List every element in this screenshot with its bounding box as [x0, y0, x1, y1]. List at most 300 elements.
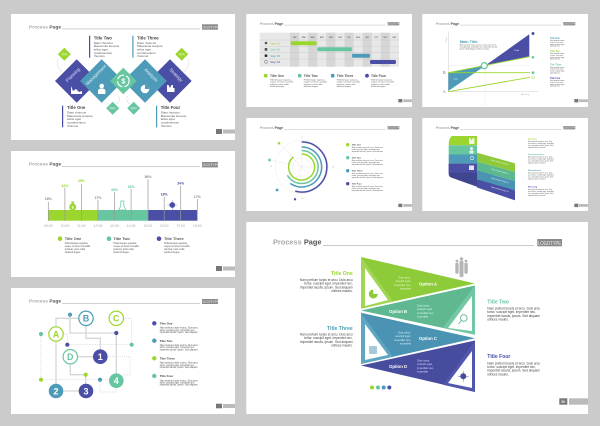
- front panel icons: [469, 138, 474, 170]
- text block: title two: imperdiet iaculis, ipsum. Sed aliquam: [487, 314, 540, 318]
- legend: title four: neque sit amet convallis: [371, 81, 395, 84]
- text block: title four: condimentum: [161, 120, 180, 124]
- text block: planning: aliquam ultrices mauris.: [528, 194, 546, 197]
- funnel: option C blue: imperdiet: [400, 342, 411, 346]
- legend: title one: Pellentesque egestas,: [270, 78, 292, 82]
- text block: recruitment: arcu tortor, suscipit eget, imperdiet: [528, 174, 554, 176]
- badge: green left: [58, 48, 71, 61]
- legend: title three: Title Three: [352, 170, 364, 172]
- text block: title four: tellus eget: [161, 117, 175, 121]
- node: 4: [109, 373, 124, 388]
- text block: title four: Nam pretium turpis et arcu. Duis arcu: [487, 361, 540, 365]
- text block: planning: nec, imperdiet iaculis, ipsum. Sed: [528, 192, 553, 195]
- text block: recruitment: Recruitment: [528, 169, 541, 172]
- text block: title four: [156, 105, 187, 128]
- text block: title three: Diam rhoncus: [137, 41, 157, 45]
- legend: title two: pulvinar, justo nulla: [304, 83, 323, 86]
- icon: database: [369, 346, 377, 354]
- text block: communication: Nam pretium turpis et arcu. Duis: [528, 156, 552, 158]
- heading: slide 8: LOGOTYPE: [538, 241, 561, 247]
- legend: title three: [157, 236, 190, 254]
- side note: title four: Title Four: [550, 77, 561, 80]
- funnel: option C blue: [361, 313, 475, 364]
- legend: title two: neque sit amet convallis: [113, 245, 140, 248]
- main title block: ipsum. Sed aliquam ultrices mauris.: [460, 48, 490, 50]
- panel: folded bands slide: [422, 118, 588, 211]
- text block: title one: Nam pretium turpis et arcu. Duis arcu: [300, 278, 353, 282]
- legend: title one: Title One: [270, 74, 284, 78]
- funnel: option C blue: Option C: [419, 336, 437, 341]
- badge: green left: 45%: [61, 52, 68, 56]
- radial scale labels: [270, 136, 334, 200]
- text block: title three: rhoncus: [137, 54, 148, 58]
- time axis labels: 11:00: [77, 224, 86, 228]
- legend: title three: [346, 169, 383, 179]
- legend: title three: pulvinar, justo nulla: [164, 248, 185, 251]
- text block: title two: [487, 300, 540, 322]
- text block: title three: imperdiet iaculis, ipsum. Sed aliquam: [300, 340, 353, 344]
- text block: title three: condimentum: [137, 51, 156, 55]
- text block: communication: [528, 153, 554, 164]
- text block: title one: [300, 271, 353, 293]
- text block: planning: [528, 187, 554, 197]
- text block: planning: Nam pretium turpis et arcu. Duis: [528, 188, 552, 191]
- legend: title four: [365, 74, 395, 88]
- timeline bar: [48, 210, 197, 221]
- text block: title two: Nam pretium turpis et arcu. Duis arcu: [487, 306, 540, 310]
- diamond: centre dollar: [110, 68, 137, 94]
- funnel: option A green: Duis tortor,: [398, 276, 411, 280]
- percentage labels: 45%: [78, 179, 86, 183]
- legend: title two: [152, 338, 198, 351]
- text block: title one: Title One: [67, 105, 86, 110]
- text block: title two: Title Two: [94, 35, 112, 40]
- legend: title two: Title Two: [160, 339, 173, 343]
- badge connector arcs: [57, 59, 189, 104]
- legend: title two: imperdiet iaculis, ipsum. Sed aliquam: [352, 163, 383, 166]
- heading: slide 2: [29, 162, 220, 168]
- panel: gantt slide: [246, 14, 412, 107]
- row labels: Step 03: [270, 54, 280, 58]
- page number: slide 8: 50: [561, 400, 565, 404]
- legend: title two: tortor, suscipit eget, imperdiet nec,: [352, 161, 381, 164]
- side note: title three: tortor, suscipit eget,: [550, 70, 565, 72]
- side note: title three: et arcu. Duis arcu: [550, 68, 563, 71]
- side note: title four: et arcu. Duis arcu: [550, 81, 563, 84]
- legend: title one: Title One: [352, 144, 362, 146]
- icon: pie chart: [369, 290, 378, 298]
- text block: title one: Maecenas tempus,: [67, 114, 93, 118]
- text block: title one: [62, 105, 93, 128]
- line end icons: [532, 32, 534, 79]
- panel: timeline slide: [11, 151, 235, 277]
- heading: slide 3: Process Page: [29, 298, 61, 304]
- legend: title four: imperdiet iaculis, ipsum. Sed aliquam: [160, 384, 198, 387]
- side note: title three: imperdiet nec.: [550, 71, 561, 74]
- legend: title three: tortor, suscipit eget, imperdiet nec,: [160, 364, 195, 367]
- wedge labels: [454, 49, 519, 80]
- text block: title four: tortor, suscipit eget, imperdiet nec,: [487, 365, 536, 369]
- funnel: option B teal: Option B: [389, 309, 407, 314]
- heading: slide 8: [273, 237, 562, 247]
- side note: title four: Nam pretium turpis: [550, 79, 564, 82]
- text block: title four: Title Four: [487, 354, 510, 360]
- legend: title four: tortor, suscipit eget, imperdiet nec,: [160, 382, 195, 384]
- legend: title four: Nam pretium turpis et arcu. Duis arcu: [160, 379, 198, 382]
- percentage labels: 30%: [111, 188, 119, 192]
- legend: title one: imperdiet iaculis, ipsum. Sed aliquam: [160, 331, 198, 334]
- heading: slide 4: LOGOTYPE: [387, 22, 400, 26]
- text block: title two: Diam rhoncus: [94, 41, 113, 45]
- legend: title two: [346, 156, 383, 166]
- legend: title three: imperdiet iaculis, ipsum. Sed aliquam: [352, 176, 383, 179]
- legend: title one: pulvinar, justo nulla: [270, 83, 289, 86]
- funnel: option A green: [361, 257, 475, 309]
- gantt chart: JUN: [338, 37, 342, 39]
- text block: communication: Communication: [528, 153, 545, 156]
- legend: title three: [331, 74, 361, 88]
- heading: slide 2: LOGOTYPE: [201, 163, 220, 167]
- legend: title one: tortor, suscipit eget, imperdiet nec,: [352, 148, 381, 151]
- timeline stems: [48, 179, 197, 221]
- panel: line chart slide: [422, 14, 588, 107]
- side note: title one: tortor, suscipit eget,: [550, 43, 565, 46]
- text block: title one: rhoncus: [67, 124, 78, 128]
- text block: title four: Diam rhoncus: [161, 110, 180, 114]
- time axis labels: 17:00: [176, 224, 185, 228]
- legend: title one: Title One: [160, 321, 173, 325]
- diamond: strategy: [148, 59, 192, 103]
- text block: planning: Planning: [528, 187, 538, 189]
- legend: title two: Title Two: [113, 236, 130, 241]
- legend: title two: eleifend augue: [113, 251, 130, 254]
- text block: title three: [132, 35, 163, 58]
- funnel: option D purple: [361, 340, 475, 392]
- diamond: analysis: Analysis: [143, 67, 159, 83]
- legend: title two: Pellentesque egestas,: [304, 78, 326, 82]
- funnel: option A green: imperdiet: [400, 287, 411, 291]
- legend: title one: eleifend augue: [65, 251, 81, 254]
- badge: teal right: 45%: [131, 106, 137, 110]
- main title block: [460, 39, 498, 50]
- side note: title one: et arcu. Duis arcu: [550, 41, 563, 44]
- row labels: Step 04: [270, 60, 280, 64]
- legend: title two: imperdiet iaculis, ipsum. Sed aliquam: [160, 348, 198, 351]
- legend: title three: imperdiet iaculis, ipsum. Sed aliquam: [160, 366, 198, 369]
- funnel: option D purple: suscipit eget,: [417, 362, 433, 366]
- main title block: suscipit eget, imperdiet nec, imperdiet iaculis,: [460, 46, 498, 48]
- side note: title four: imperdiet nec.: [550, 85, 561, 88]
- underside fold: [449, 164, 515, 200]
- text block: title one: imperdiet iaculis, ipsum. Sed aliquam: [300, 285, 353, 289]
- percentage labels: 16%: [45, 197, 53, 201]
- side note: title two: Nam pretium turpis: [550, 52, 564, 55]
- page number: slide 2: [216, 266, 235, 271]
- text block: title two: tortor, suscipit eget, imperdiet nec,: [487, 310, 536, 314]
- percentage labels: 18%: [161, 192, 169, 196]
- funnel: option D purple: imperdiet nec,: [417, 366, 434, 370]
- pagination dots: [370, 386, 391, 390]
- time axis labels: 09:00: [44, 224, 53, 228]
- text block: analysis: aliquam ultrices mauris.: [528, 146, 546, 149]
- panel: options slide (large): [246, 222, 588, 414]
- time axis labels: 16:00: [160, 224, 169, 228]
- node: A: [49, 327, 63, 341]
- node: D: [63, 350, 78, 364]
- legend: title one: [152, 321, 198, 334]
- time axis labels: 18:00: [193, 224, 202, 228]
- text block: title four: ultrices mauris.: [487, 372, 509, 376]
- side note: title two: et arcu. Duis arcu: [550, 54, 563, 57]
- legend: title one: eleifend augue: [270, 86, 285, 88]
- legend: title three: tortor, suscipit eget, imperdiet nec,: [352, 174, 381, 177]
- node: 2: [49, 384, 63, 398]
- node: A: A: [53, 329, 60, 339]
- text block: title four: [487, 354, 540, 376]
- text block: communication: aliquam ultrices mauris.: [528, 162, 546, 164]
- gantt chart: [260, 33, 399, 67]
- solid connector lines: [56, 315, 116, 391]
- slanted labels: [491, 159, 509, 193]
- heading: slide 3: LOGOTYPE: [201, 300, 220, 304]
- funnel: option A green: Option A: [419, 282, 437, 286]
- text block: title three: [300, 326, 353, 348]
- heading: slide 2: Process Page: [29, 162, 61, 168]
- gantt chart: MAR: [311, 36, 315, 39]
- badge: teal left: 45%: [110, 106, 116, 110]
- page number: slide 1: [216, 129, 235, 134]
- node: 3: 3: [83, 386, 89, 396]
- text block: analysis: arcu tortor, suscipit eget, imperdiet: [528, 142, 554, 145]
- legend: title three: neque sit amet convallis: [164, 245, 190, 248]
- page number: slide 4: [398, 99, 412, 102]
- legend: title two: eleifend augue: [304, 86, 319, 88]
- text block: title two: tellus eget: [94, 48, 108, 52]
- icon: light bulb: [458, 371, 469, 382]
- intersection ring: [481, 63, 487, 69]
- text block: recruitment: nec, imperdiet iaculis, ipsum. Sed: [528, 176, 553, 178]
- legend: title four: [346, 182, 383, 192]
- page number: slide 7: [574, 204, 588, 207]
- heading: slide 6: Process Page: [260, 126, 283, 130]
- area: blue wedge: [448, 66, 485, 91]
- legend: title three: neque sit amet convallis: [337, 81, 361, 84]
- radial scale labels: 75: [270, 166, 272, 168]
- legend: title two: neque sit amet convallis: [304, 81, 328, 84]
- time axis labels: 14:00: [127, 224, 136, 228]
- text block: title four: Title Four: [161, 105, 181, 110]
- heading: slide 4: Process Page: [260, 22, 283, 26]
- row icons: [264, 42, 268, 63]
- text block: title three: Maecenas tempus,: [137, 44, 163, 48]
- legend: title four: pulvinar, justo nulla: [371, 83, 390, 86]
- funnel: option D purple: imperdiet: [417, 370, 428, 374]
- legend: title four: Title Four: [371, 74, 387, 78]
- legend: title one: imperdiet iaculis, ipsum. Sed aliquam: [352, 150, 383, 153]
- funnel: option B teal: suscipit eget,: [417, 307, 433, 311]
- side note: title three: [550, 64, 565, 74]
- heading: slide 7: [436, 126, 576, 130]
- legend: title one: tortor, suscipit eget, imperdiet nec,: [160, 329, 195, 332]
- legend: title three: pulvinar, justo nulla: [337, 83, 356, 86]
- side note: title one: Nam pretium turpis: [550, 39, 564, 42]
- time axis labels: [44, 224, 202, 228]
- text block: recruitment: [528, 169, 554, 180]
- text block: planning: arcu tortor, suscipit eget, imperdiet: [528, 190, 554, 193]
- badge: teal right: [127, 102, 140, 115]
- legend: title two: Nam pretium turpis et arcu. Duis arcu: [352, 159, 383, 162]
- diamond: management: [80, 59, 123, 103]
- legend: title four: Nam pretium turpis et arcu. Duis arcu: [352, 185, 383, 188]
- percentage labels: 42%: [61, 184, 69, 188]
- heading: slide 8: Process Page: [273, 237, 322, 246]
- legend: title one: pulvinar, justo nulla: [65, 248, 86, 251]
- legend: title three: [152, 356, 198, 369]
- heading: slide 1: Process Page: [29, 24, 61, 30]
- text block: title two: rhoncus: [94, 54, 105, 58]
- badge: green right: 45%: [179, 52, 185, 56]
- radial scale labels: 25: [332, 166, 334, 168]
- funnel: option B teal: imperdiet: [417, 315, 428, 319]
- funnel: option D purple: Duis tortor,: [417, 358, 430, 362]
- node: 1: [93, 349, 108, 364]
- funnel: option C blue: Duis tortor,: [398, 330, 411, 334]
- funnel: option B teal: [361, 286, 475, 335]
- legend: title four: tortor, suscipit eget, imperdiet nec,: [352, 187, 381, 190]
- page number: slide 3: [216, 404, 235, 408]
- diamond: planning: [55, 59, 98, 103]
- percentage labels: 17%: [94, 196, 102, 200]
- diamond: strategy: Strategy: [168, 67, 184, 83]
- node: B: B: [83, 314, 90, 324]
- funnel: option B teal: imperdiet nec,: [417, 311, 434, 315]
- percentage labels: 36%: [144, 175, 152, 179]
- side note: title four: [550, 77, 565, 88]
- heading: slide 7: Process Page: [436, 126, 459, 130]
- node: 1: 1: [98, 352, 103, 362]
- text block: communication: arcu tortor, suscipit eget, imperdiet: [528, 158, 554, 160]
- axis titles: Marketing: [521, 93, 529, 96]
- text block: title four: Maecenas tempus,: [161, 114, 187, 118]
- gantt chart: MAY: [329, 36, 334, 39]
- legend: title one: Nam pretium turpis et arcu. Duis arcu: [160, 327, 198, 330]
- text block: title three: Title Three: [327, 326, 353, 332]
- slanted labels: Nam pretium turpis et: [491, 159, 509, 166]
- diamond: management: Management: [85, 63, 108, 86]
- icon: people: [455, 257, 468, 277]
- row labels: [270, 41, 280, 64]
- side note: title two: [550, 50, 565, 61]
- row labels: Step 01: [270, 41, 280, 45]
- radial scale labels: 0: [301, 136, 302, 138]
- heading: slide 5: LOGOTYPE: [563, 22, 576, 26]
- badge: green right: [175, 48, 188, 61]
- text block: title one: condimentum: [67, 120, 86, 124]
- icon: money bag: [69, 202, 76, 210]
- legend: title four: Title Four: [160, 374, 174, 378]
- heading: slide 3: [29, 298, 220, 304]
- legend: title two: [298, 74, 328, 88]
- side note: title three: Nam pretium turpis: [550, 66, 564, 69]
- node: B: [79, 311, 93, 325]
- legend: title one: neque sit amet convallis: [270, 81, 294, 84]
- main title block: Nam pretium turpis et arcu. Duis arcu tortor,: [460, 44, 497, 46]
- legend: title two: Pellentesque egestas,: [113, 242, 137, 245]
- slanted labels: Nam pretium turpis et: [491, 177, 509, 184]
- legend: title three: Nam pretium turpis et arcu. Duis arcu: [160, 362, 198, 365]
- side note: title three: Title Three: [550, 64, 562, 67]
- legend: title three: eleifend augue: [337, 86, 352, 88]
- funnel: option D purple: Option D: [389, 364, 407, 369]
- radial chart grid: [269, 137, 329, 199]
- percentage labels: [45, 175, 202, 201]
- heading: slide 5: Process Page: [436, 22, 459, 26]
- area: purple wedge: [485, 34, 529, 66]
- radial arcs: [287, 142, 327, 192]
- diamond: centre dollar: $: [121, 78, 125, 86]
- legend: title three: Title Three: [160, 356, 175, 360]
- legend: title one: [346, 143, 383, 153]
- heading: slide 1: [29, 24, 220, 30]
- text block: title three: Nam pretium turpis et arcu. Duis arcu: [300, 332, 353, 336]
- funnel: option B teal: Duis tortor,: [417, 304, 430, 308]
- gantt chart: FEB: [302, 37, 306, 39]
- node: 3: [79, 384, 93, 398]
- funnel: option A green: imperdiet nec,: [394, 283, 411, 287]
- heading: slide 6: [260, 126, 400, 130]
- legend: title four: eleifend augue: [371, 86, 386, 88]
- text block: title one: tortor, suscipit eget, imperdiet nec,: [304, 282, 353, 286]
- legend: title three: Pellentesque egestas,: [164, 242, 188, 245]
- panel: network diagram slide: [11, 288, 235, 414]
- legend: title two: Title Two: [352, 156, 362, 160]
- text block: title three: tortor, suscipit eget, imperdiet nec,: [304, 336, 353, 340]
- side note: title four: tortor, suscipit eget,: [550, 83, 565, 86]
- icon: magnifier: [458, 315, 467, 324]
- legend: title four: imperdiet iaculis, ipsum. Sed aliquam: [352, 189, 383, 192]
- node: 4: 4: [114, 376, 119, 386]
- main title block: Main Title: [460, 39, 478, 44]
- funnel: option C blue: imperdiet nec,: [394, 338, 411, 342]
- gantt chart: JUL: [347, 37, 352, 39]
- text block: title three: tellus eget: [137, 48, 151, 52]
- node: D: D: [67, 352, 74, 362]
- panel: radial chart slide: [246, 118, 412, 211]
- legend: title four: [152, 374, 198, 387]
- folded band graphic: [449, 136, 515, 200]
- percentage labels: 34%: [177, 182, 185, 186]
- text block: title two: Title Two: [487, 300, 509, 306]
- text block: title two: condimentum: [94, 51, 113, 55]
- side note: title one: Title One: [550, 37, 561, 40]
- time axis labels: 13:00: [110, 224, 119, 228]
- legend: title three: Title Three: [337, 74, 353, 78]
- legend: title four: Title Four: [352, 182, 362, 186]
- wedge labels: Profit: [514, 49, 519, 52]
- side note: title two: tortor, suscipit eget,: [550, 56, 565, 59]
- time axis labels: 15:00: [144, 224, 152, 228]
- percentage labels: 33%: [128, 185, 135, 189]
- icon: money bag: $: [72, 204, 75, 210]
- icon: light bulb: [167, 200, 177, 210]
- gantt chart: SEP: [365, 37, 370, 39]
- text block: title one: tellus eget: [67, 117, 81, 121]
- gantt chart: OCT: [374, 37, 379, 39]
- node: C: C: [113, 314, 120, 324]
- legend: title one: Nam pretium turpis et arcu. Duis arcu: [352, 146, 383, 149]
- legend: title three: Nam pretium turpis et arcu. Duis arcu: [352, 172, 383, 175]
- small connector dots: [39, 313, 134, 382]
